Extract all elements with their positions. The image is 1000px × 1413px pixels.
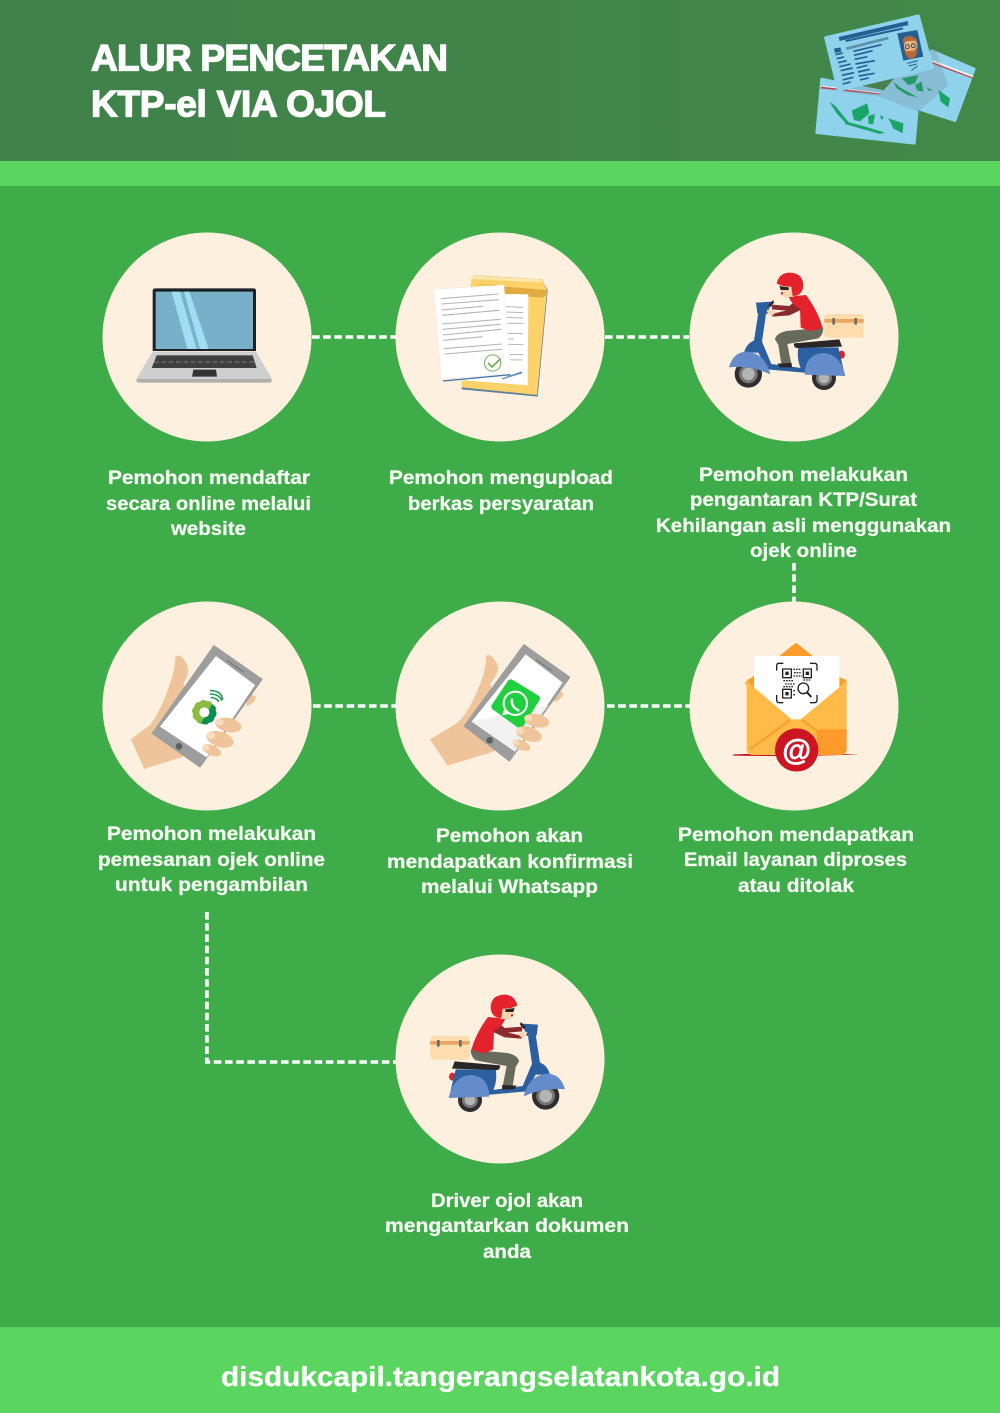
connector: step 3 to 6 (792, 563, 796, 603)
connector: step 2 to 3 (605, 335, 689, 339)
step 3 text: Pemohon melakukan (699, 464, 908, 486)
step 5 text (387, 825, 633, 898)
icon: KTP cards (817, 16, 974, 143)
icon: documents folder (434, 275, 548, 397)
step 7 text: anda (483, 1241, 531, 1263)
step 1 text: website (170, 518, 246, 540)
step 3 text: ojek online (750, 540, 857, 562)
step 1: laptop (102, 232, 312, 442)
step 2 text: berkas persyaratan (408, 493, 594, 515)
step 2 text (389, 467, 613, 515)
step 6 text: Pemohon mendapatkan (678, 824, 914, 846)
footer url: disdukcapil.tangerangselatankota.go.id (221, 1361, 780, 1392)
step 7: driver delivering (396, 954, 604, 1164)
step 3 text (656, 464, 951, 562)
connector: step 1 to 2 (312, 335, 396, 339)
step 4 text (98, 823, 325, 896)
icon: hand holding phone with gear and signal (131, 646, 262, 769)
step 4 text: Pemohon melakukan (107, 823, 316, 845)
step 5 text: melalui Whatsapp (421, 876, 598, 898)
icon: envelope with QR letter and at badge: @ (782, 734, 811, 767)
step 3 text: pengantaran KTP/Surat (690, 489, 918, 511)
step 7 text: mengantarkan dokumen (385, 1215, 629, 1237)
step 5 text: mendapatkan konfirmasi (387, 851, 633, 873)
step 6 text (678, 824, 914, 897)
step 4 text: untuk pengambilan (115, 874, 308, 896)
step 7 text: Driver ojol akan (431, 1190, 583, 1212)
footer band (0, 1327, 1000, 1413)
step 1 text: Pemohon mendaftar (108, 467, 310, 489)
icon: envelope with QR letter and at badge (733, 644, 859, 772)
connector: step 4 to 7 (207, 912, 396, 1062)
connector: step 5 to 4 (313, 704, 396, 708)
icon: laptop (137, 288, 272, 383)
step 4: phone with gear (102, 602, 312, 810)
header light strip (0, 161, 1000, 186)
step 1 text: secara online melalui (106, 493, 311, 515)
title (91, 38, 448, 124)
step 5 text: Pemohon akan (436, 825, 583, 847)
step 7 text (385, 1190, 629, 1263)
step 4 text: pemesanan ojek online (98, 849, 325, 871)
step 6: email envelope (690, 602, 898, 810)
title: ALUR PENCETAKAN (91, 38, 448, 78)
connector: step 6 to 5 (607, 704, 691, 708)
icon: scooter rider facing left (729, 273, 864, 390)
icon: scooter rider facing right (430, 995, 565, 1112)
header band (0, 0, 1000, 161)
step 2 text: Pemohon mengupload (389, 467, 613, 489)
step 5: phone with WhatsApp (396, 602, 604, 810)
step 2: documents (396, 232, 604, 442)
step 3 text: Kehilangan asli menggunakan (656, 515, 951, 537)
step 6 text: Email layanan diproses (684, 849, 907, 871)
step 6 text: atau ditolak (738, 875, 854, 897)
step 1 text (106, 467, 311, 540)
icon: hand holding phone with WhatsApp logo (430, 645, 569, 766)
title: KTP-el VIA OJOL (91, 84, 386, 124)
step 3: courier on scooter (690, 232, 898, 442)
